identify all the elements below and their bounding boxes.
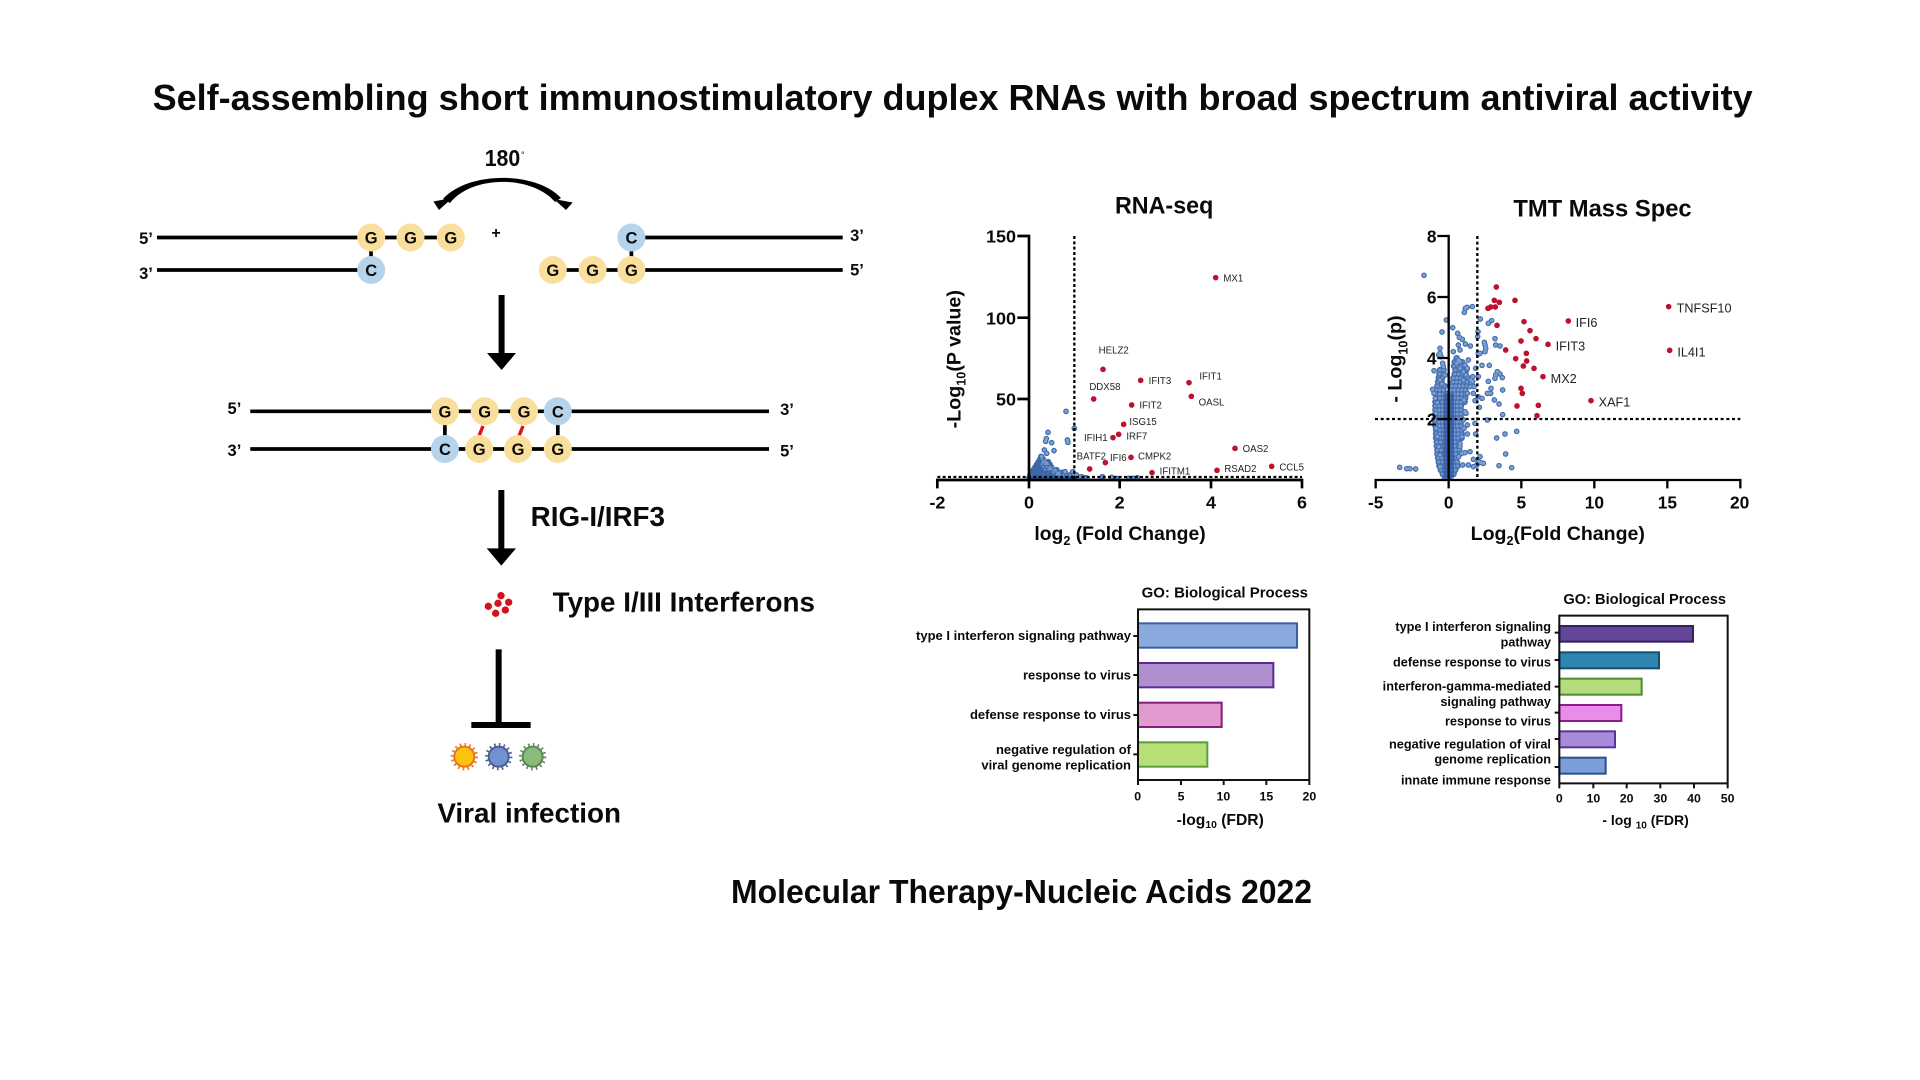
- x tick labels: -5: [1368, 492, 1384, 512]
- right RNA strand pair: C: [625, 230, 637, 248]
- bar: type I interferon: [1559, 626, 1693, 642]
- threshold lines: [937, 236, 1302, 480]
- x tick labels: 6: [1297, 492, 1307, 512]
- tick labels: 40: [1687, 791, 1701, 805]
- x tick labels: 0: [1444, 492, 1453, 512]
- interferons label: Type I/III Interferons: [553, 587, 815, 618]
- y axis title: -Log: [944, 386, 966, 428]
- gene labels: IFI6: [1110, 453, 1127, 464]
- gene labels: IRF7: [1126, 432, 1147, 443]
- y axis title: 10: [1396, 341, 1410, 355]
- panel: RNA self-assembly schematic: [139, 145, 864, 463]
- tick labels: 30: [1653, 791, 1667, 805]
- category labels: response to virus: [1445, 714, 1551, 728]
- tick labels: 15: [1259, 790, 1273, 804]
- plus sign: +: [491, 225, 501, 242]
- tick labels: [1556, 791, 1735, 805]
- tick labels: [1134, 790, 1316, 804]
- protein labels: XAF1: [1599, 396, 1630, 410]
- x tick labels: [929, 492, 1307, 512]
- chart: RNA-seq volcano plot: [929, 192, 1307, 548]
- axis title: - log: [1602, 812, 1632, 828]
- arrow: assembly: [487, 295, 516, 370]
- category labels: response to virus: [1023, 667, 1131, 682]
- assembled duplex: G: [512, 441, 524, 459]
- y axis title: (p): [1385, 315, 1407, 341]
- axis title: (FDR): [1217, 812, 1264, 829]
- x axis title: (Fold Change): [1514, 523, 1645, 545]
- frame and ticks: [1133, 609, 1309, 785]
- left RNA strand pair: 3’: [139, 265, 153, 283]
- assembled duplex: G: [473, 441, 486, 459]
- gene labels: CCL5: [1279, 462, 1304, 473]
- assembled duplex: C: [439, 441, 451, 459]
- assembled duplex: G: [518, 403, 530, 421]
- category labels: negative regulation of: [996, 742, 1132, 757]
- gene labels: RSAD2: [1224, 464, 1257, 475]
- x axis title: (Fold Change): [1070, 524, 1206, 545]
- x tick labels: 15: [1658, 492, 1677, 512]
- axis title: -log: [1177, 812, 1205, 829]
- arrow: signaling: [487, 490, 516, 566]
- chart: GO biological process, RNA-seq: [916, 584, 1316, 831]
- blue data points: [1029, 411, 1137, 479]
- x tick labels: 0: [1024, 492, 1034, 512]
- category labels: innate immune response: [1401, 774, 1551, 788]
- chart heading: GO: Biological Process: [1142, 584, 1308, 601]
- gene labels: OAS2: [1243, 444, 1268, 455]
- category labels: interferon-gamma-mediated: [1383, 679, 1551, 693]
- y tick labels: [1427, 226, 1437, 429]
- assembled duplex: [228, 397, 794, 463]
- y axis title: 10: [955, 372, 969, 386]
- title: Self-assembling short immunostimulatory duplex RNAs with broad spectrum antiviral activity: [153, 77, 1753, 118]
- bar: response to virus: [1559, 705, 1621, 721]
- x tick labels: 20: [1730, 492, 1749, 512]
- bar: negative regulation: [1559, 731, 1615, 747]
- axis tick labels: 50: [996, 390, 1016, 410]
- protein labels: IFI6: [1576, 316, 1597, 330]
- frame and ticks: [1555, 616, 1728, 788]
- assembled duplex: C: [552, 403, 564, 421]
- heading: RNA-seq: RNA-seq: [1115, 192, 1213, 219]
- y tick labels: 6: [1427, 287, 1437, 307]
- bar: defense response: [1559, 652, 1659, 668]
- degree mark: °: [521, 150, 525, 160]
- y axis title: (P value): [944, 290, 966, 372]
- chart: TMT Mass Spec volcano plot: [1368, 196, 1749, 548]
- gene labels: IFIT3: [1149, 376, 1171, 387]
- tick labels: 20: [1620, 791, 1634, 805]
- tick labels: 0: [1556, 791, 1563, 805]
- gene labels: ISG15: [1129, 417, 1157, 428]
- tick labels: 20: [1302, 790, 1316, 804]
- tick labels: 10: [1216, 790, 1230, 804]
- icon: viruses: [453, 745, 544, 768]
- x axis title: Log: [1471, 523, 1506, 545]
- category labels: defense response to virus: [970, 707, 1131, 722]
- category labels: defense response to virus: [1393, 656, 1551, 670]
- chart heading: GO: Biological Process: [1563, 592, 1726, 608]
- gene labels: IFIT1: [1199, 372, 1222, 383]
- bar: defense response: [1138, 703, 1222, 727]
- left RNA strand pair: G: [444, 230, 457, 248]
- tick labels: 5: [1178, 790, 1185, 804]
- y tick labels: 4: [1427, 348, 1437, 368]
- red significant proteins: [1488, 287, 1670, 416]
- right RNA strand pair: [539, 224, 864, 284]
- gene labels: IFITM1: [1160, 466, 1190, 477]
- gene labels: CMPK2: [1138, 451, 1171, 462]
- bar: negative regulation: [1138, 742, 1207, 767]
- protein labels: IL4I1: [1677, 346, 1705, 360]
- x axis title: log: [1034, 524, 1063, 545]
- right RNA strand pair: 5’: [850, 262, 864, 280]
- right RNA strand pair: G: [625, 262, 638, 280]
- y axis title: - Log: [1385, 355, 1407, 403]
- right RNA strand pair: G: [586, 262, 599, 280]
- x axis title: 2: [1063, 534, 1070, 548]
- protein labels: TNFSF10: [1677, 302, 1732, 316]
- inhibition bar: [471, 649, 531, 725]
- viral infection label: Viral infection: [437, 797, 621, 828]
- citation footer: Molecular Therapy-Nucleic Acids 2022: [731, 873, 1312, 910]
- right RNA strand pair: 3’: [850, 227, 864, 245]
- axis title: (FDR): [1647, 812, 1689, 828]
- y tick labels: 2: [1427, 409, 1436, 429]
- x axis title: 2: [1506, 534, 1514, 548]
- left RNA strand pair: C: [365, 262, 377, 280]
- bar: response to virus: [1138, 663, 1273, 687]
- right RNA strand pair: G: [546, 262, 559, 280]
- tick labels: 50: [1721, 791, 1735, 805]
- assembled duplex: G: [551, 441, 564, 459]
- gene labels: HELZ2: [1099, 345, 1129, 356]
- left RNA strand pair: 5’: [139, 230, 153, 248]
- axis tick labels: [986, 227, 1016, 410]
- blue data points: [1400, 275, 1517, 478]
- left RNA strand pair: G: [365, 230, 378, 248]
- tick labels: 0: [1134, 790, 1141, 804]
- axis title: 10: [1636, 820, 1647, 831]
- protein labels: [1551, 302, 1732, 410]
- threshold lines: [1375, 236, 1740, 480]
- bar: innate immune: [1559, 758, 1606, 774]
- axis title: 10: [1205, 820, 1217, 831]
- left RNA strand pair: [139, 224, 465, 284]
- rotation label: 180: [485, 145, 520, 171]
- category labels: negative regulation of viral: [1389, 737, 1551, 751]
- tick labels: 10: [1586, 791, 1600, 805]
- protein labels: IFIT3: [1556, 339, 1585, 353]
- protein labels: MX2: [1551, 372, 1577, 386]
- gene labels: [1077, 273, 1304, 477]
- panel: pathway to interferons and viral inhibition: [437, 490, 815, 828]
- gene labels: BATF2: [1077, 451, 1106, 462]
- gene labels: MX1: [1223, 273, 1243, 284]
- gene labels: IFIH1: [1084, 433, 1108, 444]
- category labels: [1383, 620, 1551, 788]
- red significant genes: [1090, 278, 1272, 473]
- axes: [937, 236, 1302, 488]
- category labels: pathway: [1501, 636, 1551, 650]
- x tick labels: [1368, 492, 1749, 512]
- assembled duplex: 3’: [780, 401, 794, 419]
- gene labels: DDX58: [1089, 382, 1120, 393]
- x tick labels: 5: [1517, 492, 1527, 512]
- axis tick labels: 150: [986, 227, 1016, 247]
- gene labels: IFIT2: [1139, 401, 1162, 412]
- assembled duplex: G: [478, 403, 491, 421]
- assembled duplex: 5’: [780, 442, 794, 460]
- heading: TMT Mass Spec: TMT Mass Spec: [1513, 196, 1692, 223]
- category labels: viral genome replication: [981, 758, 1131, 773]
- x tick labels: 4: [1206, 492, 1216, 512]
- left RNA strand pair: G: [404, 230, 417, 248]
- category labels: [916, 628, 1132, 773]
- icon: interferon dots: [485, 592, 512, 617]
- bar: interferon-gamma: [1559, 679, 1642, 695]
- category labels: signaling pathway: [1440, 695, 1551, 709]
- x tick labels: -2: [929, 492, 945, 512]
- category labels: type I interferon signaling pathway: [916, 628, 1132, 643]
- assembled duplex: 5’: [228, 400, 241, 418]
- bar: type I interferon: [1138, 623, 1297, 648]
- x tick labels: 10: [1585, 492, 1604, 512]
- y tick labels: 8: [1427, 226, 1437, 246]
- gene labels: OASL: [1199, 397, 1225, 408]
- chart: GO biological process, mass spec: [1383, 592, 1735, 831]
- category labels: genome replication: [1434, 753, 1551, 767]
- arrow: curved rotation: [433, 178, 573, 210]
- x tick labels: 2: [1115, 492, 1125, 512]
- axis tick labels: 100: [986, 308, 1016, 328]
- category labels: type I interferon signaling: [1395, 620, 1551, 634]
- axes: [1376, 236, 1740, 488]
- assembled duplex: 3’: [228, 442, 241, 460]
- RIG-I/IRF3 label: RIG-I/IRF3: [531, 501, 665, 532]
- assembled duplex: G: [438, 403, 451, 421]
